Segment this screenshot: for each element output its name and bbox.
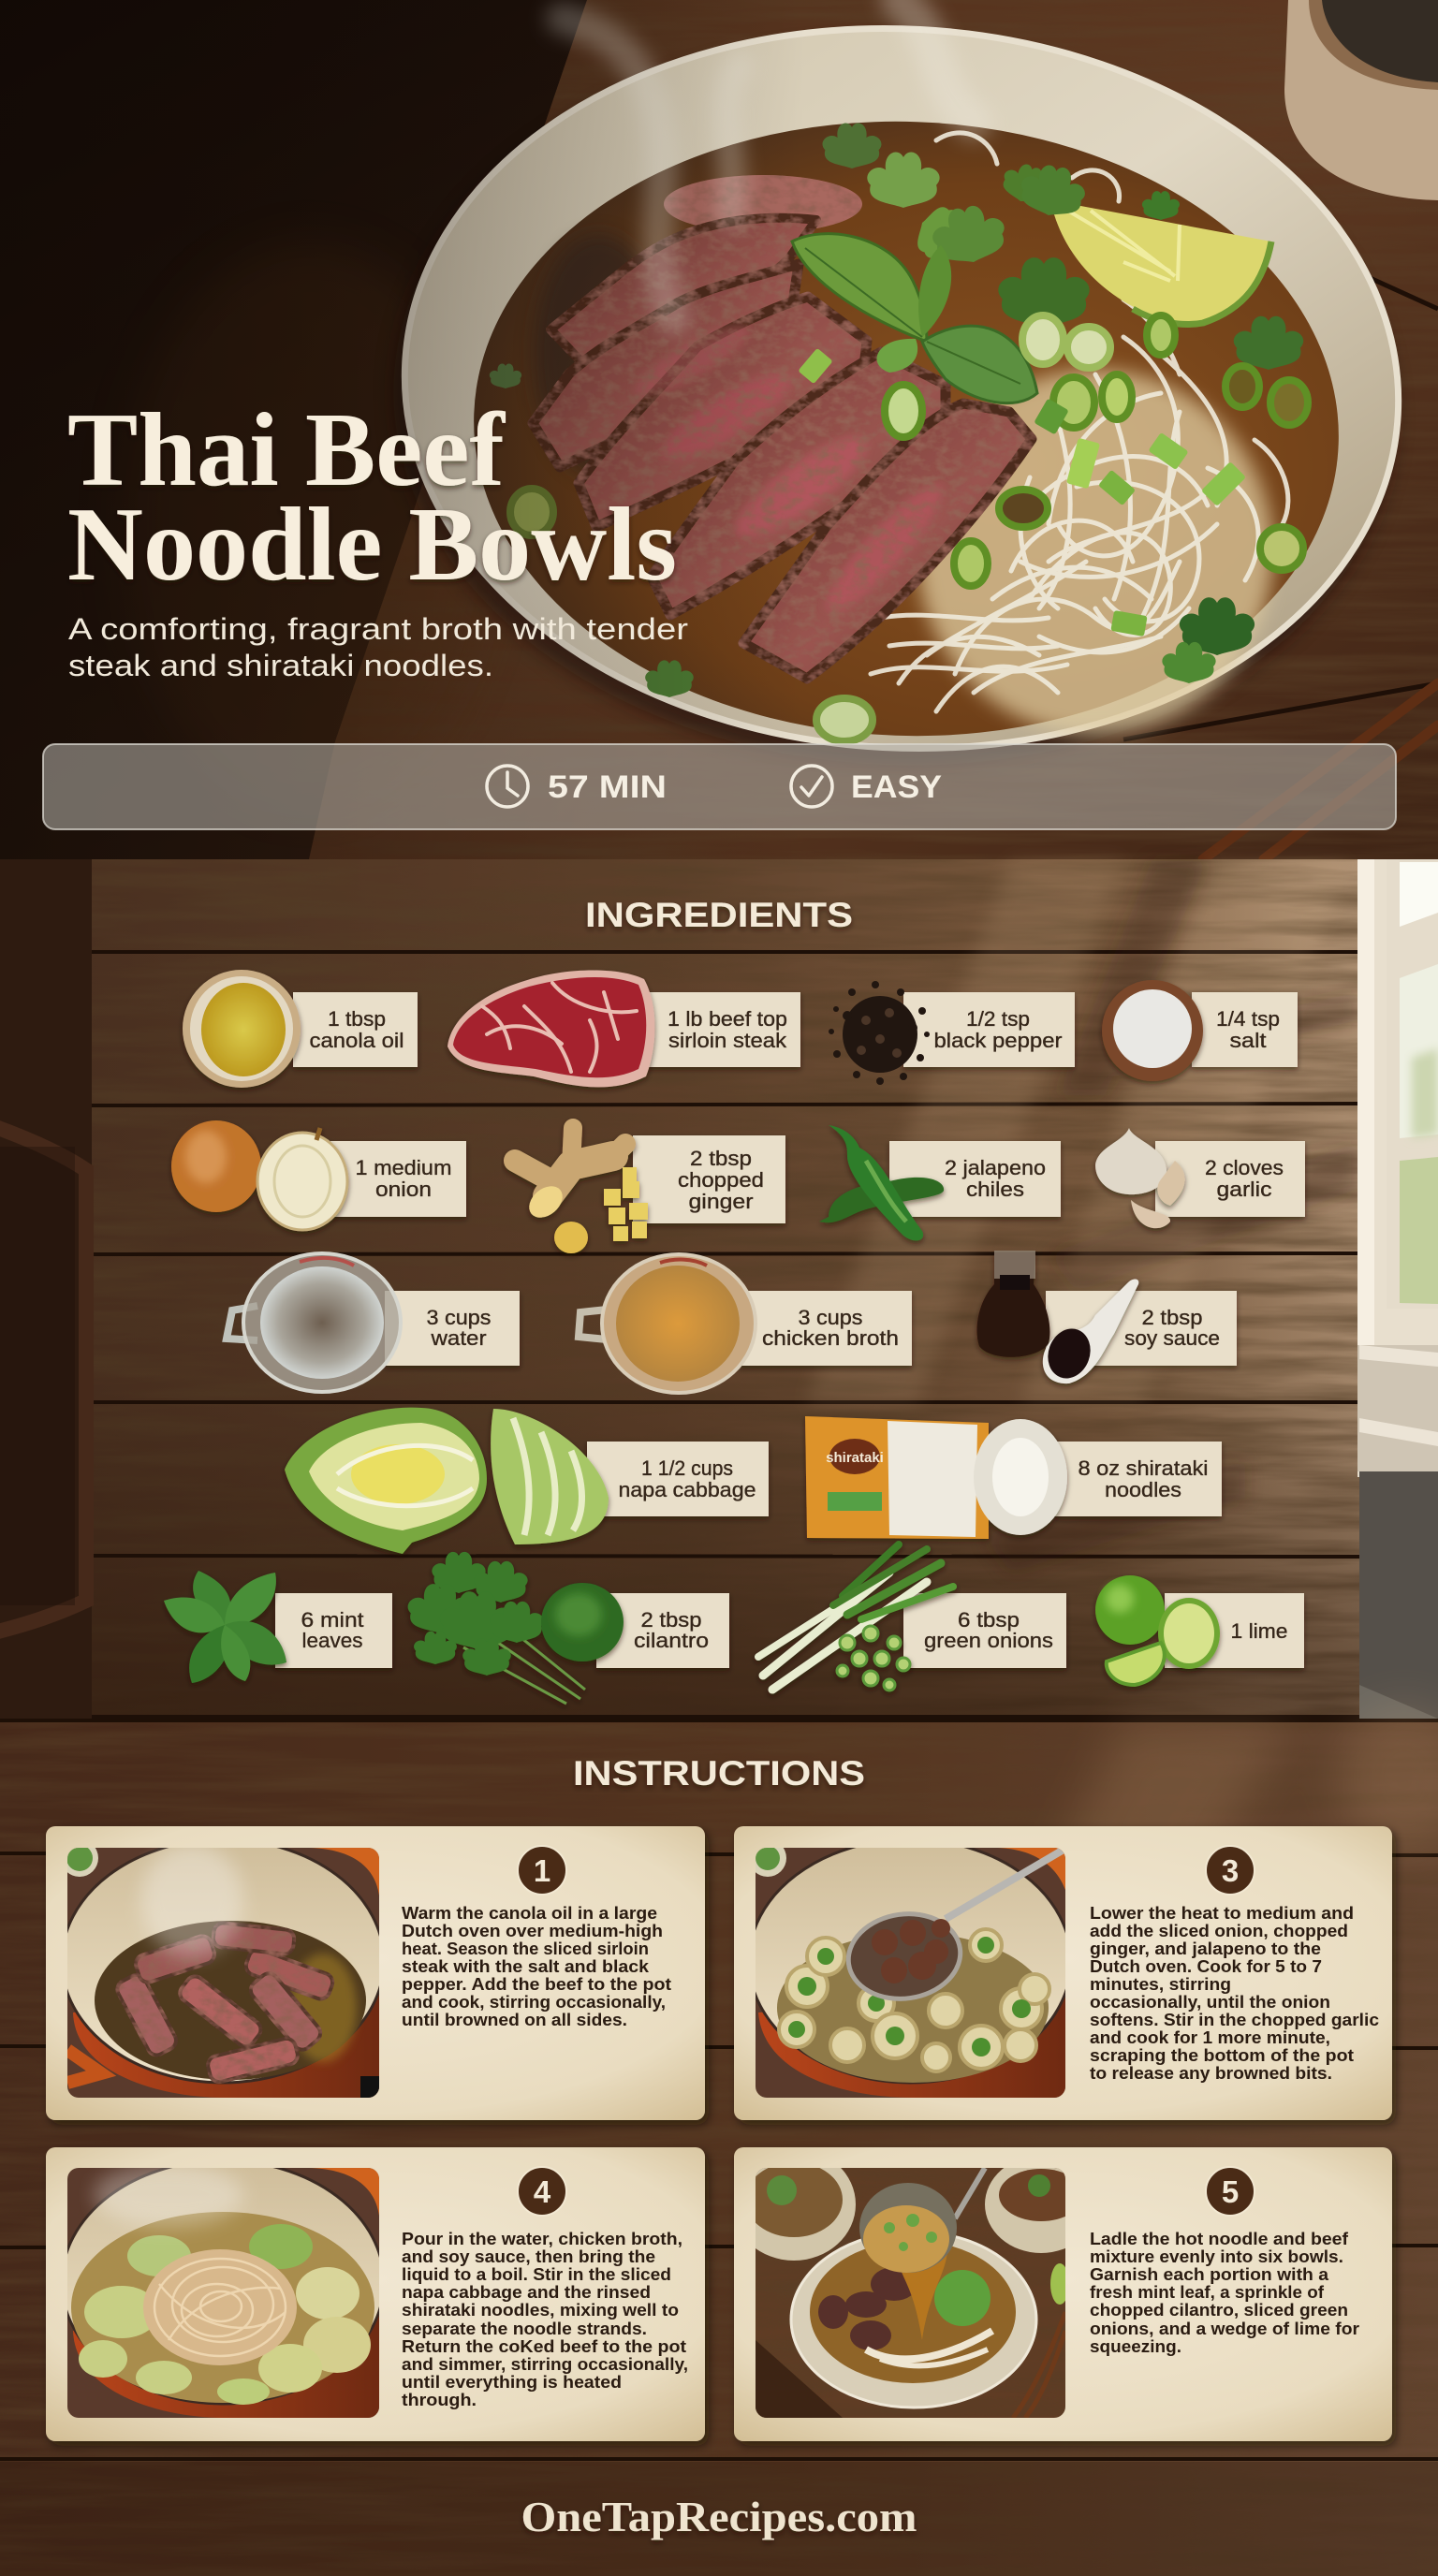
label tag: cilantro: [634, 1629, 709, 1652]
step text: softens. Stir in the chopped garlic: [1090, 2010, 1379, 2029]
icon: measuring cup of water: [227, 1253, 401, 1392]
icon: green onions: [758, 1544, 953, 1690]
ingredient: ginger: [515, 1128, 785, 1253]
label tag: soy sauce: [1124, 1326, 1220, 1350]
label tag: [739, 1291, 912, 1366]
label tag: [633, 1135, 785, 1223]
label tag: 2 jalapeno: [945, 1156, 1046, 1179]
step text: and cook for 1 more minute,: [1090, 2027, 1330, 2047]
instructions background: [0, 1704, 1438, 2576]
ingredients background: [0, 859, 1438, 1719]
step text: and simmer, stirring occasionally,: [402, 2354, 688, 2374]
ingredient: green onions: [758, 1544, 1066, 1690]
label tag: [330, 1141, 466, 1217]
difficulty label: EASY: [851, 769, 942, 805]
label tag: [1055, 1442, 1222, 1516]
step text: mixture evenly into six bowls.: [1090, 2247, 1343, 2266]
card: step 4: [46, 2147, 705, 2441]
ingredient: onion: [171, 1120, 466, 1230]
icon: oil bowl: [183, 970, 301, 1088]
step text: until everything is heated: [402, 2372, 622, 2392]
icon: mint leaves: [164, 1571, 286, 1683]
step text: heat. Season the sliced sirloin: [402, 1939, 649, 1958]
ingredient: canola oil: [183, 970, 418, 1088]
step number: [518, 2167, 566, 2216]
step image: cooking onions: [749, 1839, 1071, 2098]
label tag: black pepper: [934, 1029, 1062, 1052]
icon: shirataki package: [805, 1416, 1067, 1539]
cilantro garnish: [490, 124, 1303, 697]
icon: clock: [487, 766, 528, 807]
step text: Warm the canola oil in a large: [402, 1903, 657, 1923]
heading: ingredients: INGREDIENTS: [585, 896, 853, 934]
step text: Garnish each portion with a: [1090, 2264, 1329, 2284]
icon: garlic: [1095, 1128, 1185, 1228]
ingredient: jalapeno: [819, 1125, 1061, 1240]
icon: limes: [1095, 1575, 1220, 1685]
panel: instructions: [0, 1704, 1438, 2576]
step text: fresh mint leaf, a sprinkle of: [1090, 2282, 1325, 2302]
step text: scraping the bottom of the pot: [1090, 2045, 1354, 2065]
step number: 3: [1222, 1853, 1239, 1888]
label tag: [1155, 1141, 1305, 1217]
step text: napa cabbage and the rinsed: [402, 2282, 651, 2302]
step text: [1090, 2229, 1359, 2356]
label tag: [903, 992, 1075, 1067]
icon: salt bowl: [1102, 980, 1203, 1081]
step image: simmering noodles and cabbage: [62, 2160, 384, 2418]
ingredient: cilantro: [408, 1552, 729, 1704]
ingredient: water: [227, 1253, 520, 1392]
label tag: [293, 992, 418, 1067]
label tag: [642, 992, 800, 1067]
lime wedge: [1050, 200, 1271, 325]
label tag: 1/4 tsp: [1216, 1007, 1280, 1031]
label tag: salt: [1230, 1029, 1266, 1052]
step text: [1090, 1903, 1379, 2083]
card: step 3: [734, 1826, 1392, 2120]
step text: ginger, and jalapeno to the: [1090, 1939, 1321, 1958]
label tag: 2 tbsp: [690, 1147, 752, 1170]
chair: [0, 1125, 86, 1633]
label tag: ginger: [689, 1190, 753, 1213]
icon: measuring cup of broth: [579, 1254, 756, 1393]
footer brand: OneTapRecipes.com: [521, 2493, 917, 2540]
time label: 57 MIN: [548, 769, 667, 805]
ingredient: chicken broth: [579, 1254, 912, 1393]
label tag: sirloin steak: [668, 1029, 787, 1052]
card: step 5: [732, 2147, 1392, 2441]
label tag: 8 oz shirataki: [1078, 1456, 1208, 1480]
label tag: 1 lb beef top: [668, 1007, 787, 1031]
ingredient: beef: [448, 970, 800, 1088]
label tag: noodles: [1105, 1478, 1181, 1501]
green onion rings: [510, 315, 1308, 741]
step text: pepper. Add the beef to the pot: [402, 1974, 671, 1994]
step text: Dutch oven over medium-high: [402, 1921, 663, 1940]
step text: minutes, stirring: [1090, 1974, 1231, 1994]
label tag: [1165, 1593, 1304, 1668]
label tag: chicken broth: [762, 1326, 899, 1350]
title: Thai Beef: [67, 392, 506, 508]
icon: pepper cup: [1284, 0, 1438, 200]
step text: and cook, stirring occasionally,: [402, 1992, 666, 2012]
bowl of pho: [375, 0, 1416, 790]
step text: liquid to a boil. Stir in the sliced: [402, 2264, 671, 2284]
label tag: 3 cups: [798, 1306, 863, 1329]
step text: chopped cilantro, sliced green: [1090, 2300, 1348, 2320]
step image: ladling into bowl: [732, 2148, 1097, 2418]
label tag: 1 tbsp: [328, 1007, 386, 1031]
label tag: 2 cloves: [1205, 1156, 1284, 1179]
label tag: 6 tbsp: [958, 1608, 1020, 1632]
label tag: [1192, 992, 1298, 1067]
step number: [1206, 1846, 1255, 1895]
step text: Lower the heat to medium and: [1090, 1903, 1354, 1923]
step text: through.: [402, 2390, 477, 2409]
step text: separate the noodle strands.: [402, 2319, 647, 2338]
beef slices: [533, 175, 1032, 679]
step number: 5: [1222, 2174, 1239, 2209]
label tag: leaves: [301, 1629, 363, 1652]
step text: to release any browned bits.: [1090, 2063, 1332, 2083]
noodles: [871, 133, 1288, 735]
card: step 1: [46, 1826, 705, 2120]
step text: and soy sauce, then bring the: [402, 2247, 655, 2266]
icon: cilantro bunch: [408, 1552, 624, 1704]
ingredient: black pepper: [829, 981, 1075, 1085]
label tag: 1 medium: [356, 1156, 451, 1179]
mint leaves: [792, 234, 1037, 403]
step image: searing beef: [61, 1839, 384, 2098]
label tag: [1046, 1291, 1237, 1366]
step text: until browned on all sides.: [402, 2010, 627, 2029]
ingredient: napa cabbage: [285, 1408, 769, 1554]
icon: onion: [171, 1120, 347, 1230]
label tag: napa cabbage: [618, 1478, 756, 1501]
step text: steak with the salt and black: [402, 1956, 650, 1976]
title: [67, 392, 677, 603]
step number: 4: [534, 2174, 551, 2209]
heading: instructions: INSTRUCTIONS: [573, 1754, 865, 1793]
step text: Pour in the water, chicken broth,: [402, 2229, 682, 2248]
step text: shirataki noodles, mixing well to: [402, 2300, 679, 2320]
label tag: 2 tbsp: [1142, 1306, 1202, 1329]
label tag: 6 mint: [301, 1608, 363, 1632]
label tag: 2 tbsp: [640, 1608, 702, 1632]
label tag: [587, 1442, 769, 1516]
ingredient: soy sauce: [977, 1251, 1237, 1384]
step number: 1: [534, 1853, 550, 1888]
label tag: [903, 1593, 1066, 1668]
step number: [518, 1846, 566, 1895]
ingredient: mint: [164, 1571, 392, 1683]
ingredient: garlic: [1095, 1128, 1305, 1228]
label tag: green onions: [924, 1629, 1053, 1652]
icon: jalapeno chiles: [819, 1125, 944, 1240]
icon: check: [791, 766, 832, 807]
icon: soy bottle and spoon: [977, 1251, 1138, 1384]
icon: napa cabbage: [285, 1408, 609, 1554]
label tag: [275, 1593, 392, 1668]
stats bar: [43, 744, 1396, 829]
label tag: garlic: [1217, 1178, 1271, 1201]
step text: squeezing.: [1090, 2336, 1181, 2356]
label tag: onion: [375, 1178, 432, 1201]
subtitle: steak and shirataki noodles.: [68, 649, 493, 682]
step text: Return the coKed beef to the pot: [402, 2336, 686, 2356]
steam: [562, 0, 974, 318]
left scrim: [0, 0, 805, 859]
label tag: [889, 1141, 1061, 1217]
label tag: canola oil: [309, 1029, 404, 1052]
icon: shirataki package: shirataki: [826, 1450, 884, 1466]
step text: [402, 1903, 671, 2029]
panel: ingredients: [0, 859, 1438, 1719]
icon: peppercorns: [829, 981, 930, 1085]
icon: chopsticks: [1203, 683, 1438, 859]
label tag: chopped: [678, 1168, 764, 1192]
step text: [402, 2229, 688, 2409]
label tag: [596, 1593, 729, 1668]
label tag: 1 lime: [1230, 1619, 1288, 1643]
ingredient: shirataki: [805, 1416, 1222, 1539]
icon: ginger root: [515, 1128, 648, 1253]
step text: occasionally, until the onion: [1090, 1992, 1330, 2012]
step text: add the sliced onion, chopped: [1090, 1921, 1348, 1940]
title: Noodle Bowls: [67, 487, 677, 603]
label tag: 1 1/2 cups: [641, 1456, 733, 1480]
label tag: 1/2 tsp: [966, 1007, 1030, 1031]
subtitle: [68, 612, 688, 682]
ingredient: lime: [1095, 1575, 1304, 1685]
step number: [1206, 2167, 1255, 2216]
label tag: water: [430, 1326, 487, 1350]
step text: Dutch oven. Cook for 5 to 7: [1090, 1956, 1322, 1976]
subtitle: A comforting, fragrant broth with tender: [68, 612, 688, 646]
label tag: 3 cups: [427, 1306, 491, 1329]
step text: onions, and a wedge of lime for: [1090, 2319, 1359, 2338]
label tag: chiles: [966, 1178, 1024, 1201]
ingredient: salt: [1102, 980, 1298, 1081]
icon: raw steak: [448, 970, 655, 1088]
hero background table: [0, 0, 1438, 859]
step text: Ladle the hot noodle and beef: [1090, 2229, 1349, 2248]
panel: hero: [0, 0, 1438, 859]
window: [1357, 859, 1438, 1719]
label tag: [385, 1291, 520, 1366]
